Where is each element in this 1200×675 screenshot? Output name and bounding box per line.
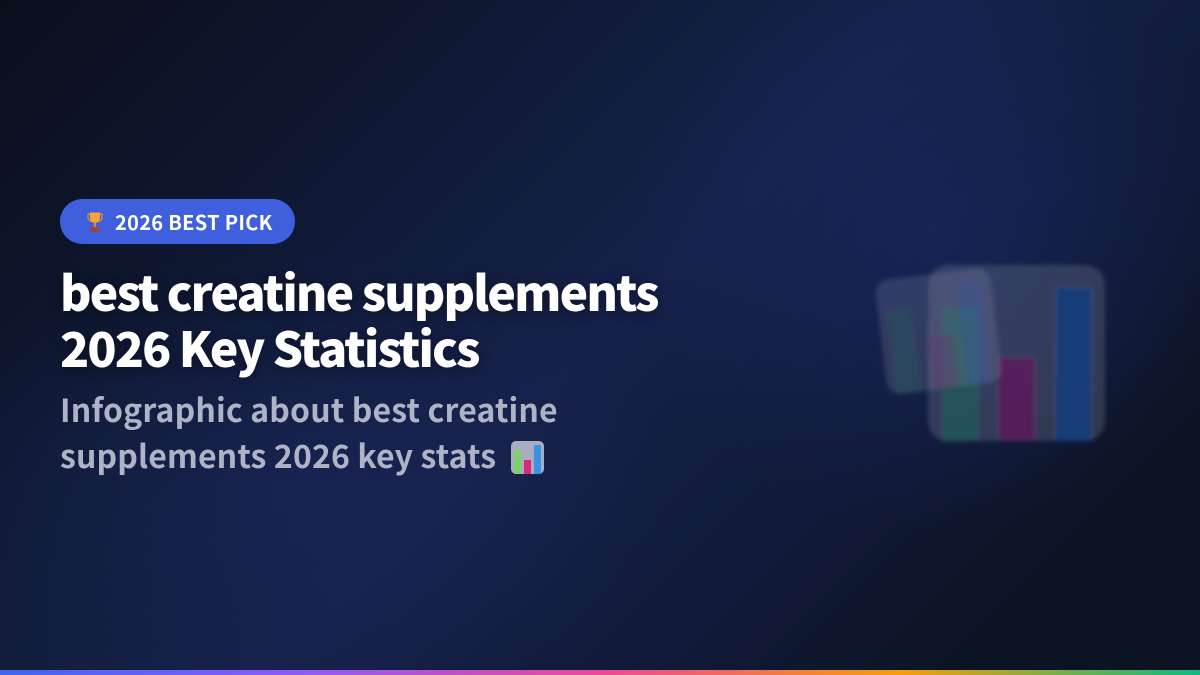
icon: large blurred bar chart — [874, 264, 1106, 444]
subtitle: supplements 2026 key stats — [60, 432, 496, 478]
subtitle — [60, 386, 558, 478]
badge: 2026 BEST PICK — [115, 207, 273, 236]
title: best creatine supplements — [60, 255, 658, 325]
icon: trophy — [87, 212, 103, 232]
title — [60, 255, 660, 380]
icon: small bar chart emoji — [511, 441, 544, 474]
subtitle: Infographic about best creatine — [60, 386, 558, 432]
rainbow bottom bar — [0, 670, 1200, 675]
title: 2026 Key Statistics — [60, 310, 479, 380]
badge — [60, 199, 295, 244]
